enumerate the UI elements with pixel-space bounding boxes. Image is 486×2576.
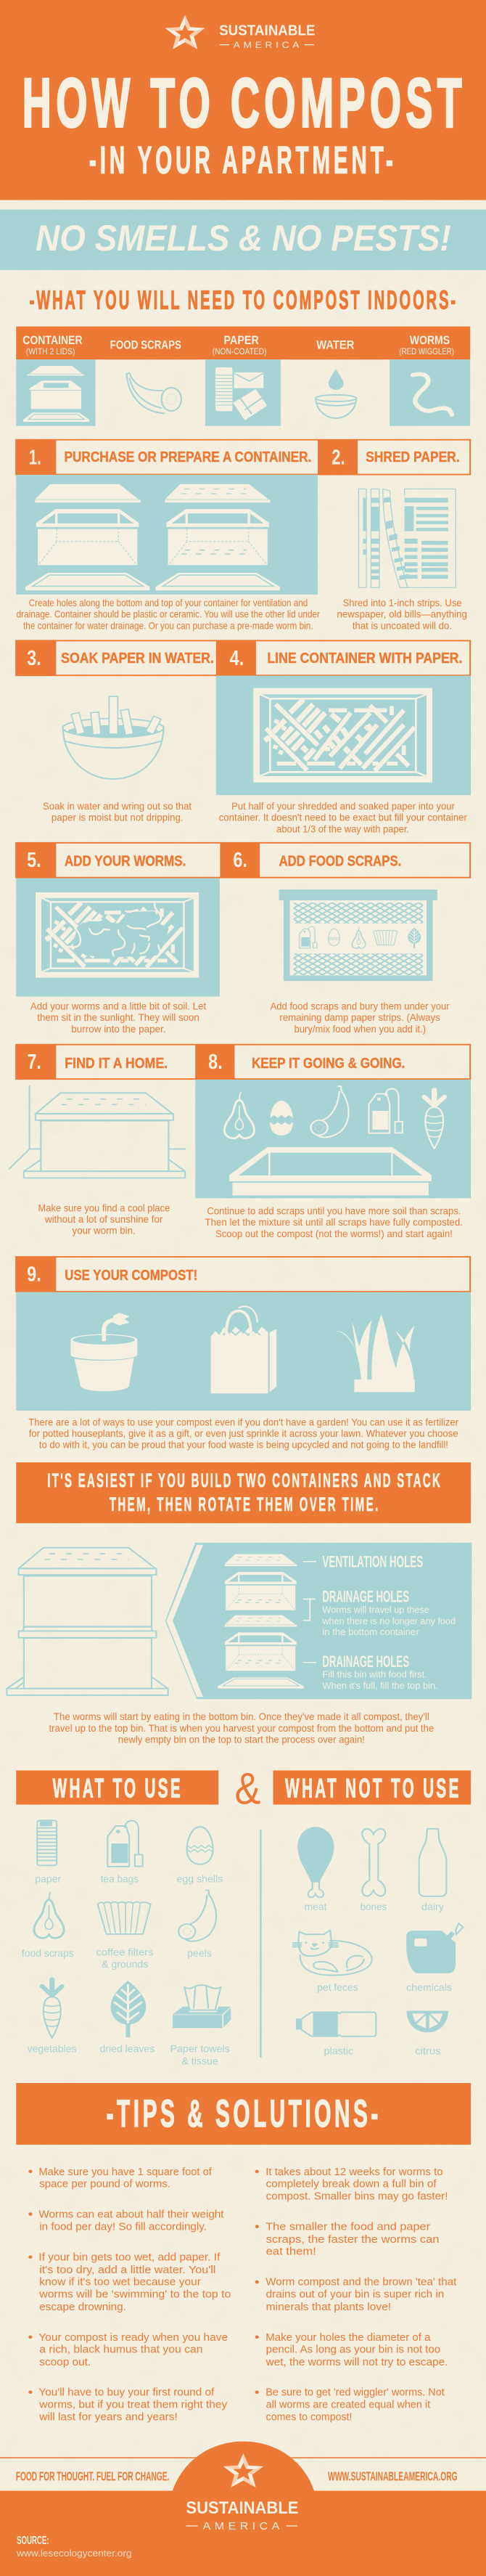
- item: plastic: plastic: [324, 2046, 353, 2057]
- step 9 body and stacking: [7, 1292, 471, 1699]
- footer logo: SUSTAINABLE: [186, 2499, 298, 2518]
- step 1 and 2 header: [16, 440, 470, 475]
- panel: step 9 uses for compost: [16, 1292, 471, 1411]
- item: meat: [297, 1827, 334, 1913]
- tips: left column: [28, 2167, 231, 2423]
- step 7 and 8 header: 7.: [28, 1050, 41, 1074]
- labels and connectors: [302, 1553, 456, 1691]
- step 9 header: USE YOUR COMPOST!: [65, 1268, 197, 1284]
- source credit: SOURCE:: [17, 2535, 49, 2547]
- tagline: FOOD FOR THOUGHT. FUEL FOR CHANGE.: [16, 2469, 169, 2483]
- text: step 1 description: drainage. Container should be plastic or ceramic. You will use the other lid under: [17, 609, 320, 620]
- text: step 5 description: burrow into the paper.: [71, 1024, 166, 1035]
- steps 1 to 4: [16, 440, 471, 835]
- text: step 6 description: Add food scraps and bury them under your: [271, 1001, 450, 1012]
- item: paper: paper: [35, 1874, 61, 1885]
- step 5 and 6 header: ADD YOUR WORMS.: [65, 854, 186, 869]
- banner: tips and solutions: -TIPS & SOLUTIONS-: [107, 2092, 378, 2135]
- step 7 and 8 header: FIND IT A HOME.: [65, 1056, 168, 1072]
- tips: right column: compost. Smaller bins may go faster!: [266, 2190, 448, 2202]
- panel: step 8 food scraps and tray: [195, 1080, 471, 1198]
- text: step 3 description: [43, 802, 191, 824]
- item: paper: [35, 1820, 61, 1885]
- text: step 8 description: Scoop out the compost (not the worms!) and start again!: [215, 1229, 453, 1240]
- item: paper towels and tissue: [170, 1985, 231, 2067]
- text: step 1 description: Create holes along the bottom and top of your container for ventilation and: [29, 598, 308, 609]
- text: step 7 description: Make sure you find a cool place: [38, 1203, 170, 1214]
- supplies header labels: FOOD SCRAPS: [110, 338, 181, 351]
- text: step 6 description: bury/mix food when you add it.): [295, 1024, 426, 1035]
- item: dairy: [419, 1829, 446, 1913]
- text: step 4 description: about 1/3 of the way with paper.: [276, 824, 409, 835]
- tips: left column: scoop out.: [39, 2357, 91, 2368]
- step 1 and 2 header: 1.: [29, 445, 41, 469]
- header area: [0, 0, 486, 426]
- illustration: paper soaking in bowl: [62, 696, 164, 779]
- heading: what you will need: -WHAT YOU WILL NEED TO COMPOST INDOORS-: [30, 287, 456, 315]
- item: citrus: [407, 2010, 448, 2057]
- supplies header labels: WATER: [316, 338, 354, 351]
- icon: paper: [205, 359, 281, 426]
- item: plastic: [296, 2012, 376, 2057]
- tips and footer: [0, 2167, 486, 2576]
- item: meat: meat: [305, 1902, 326, 1913]
- tips: left column: Worms can eat about half their weight: [38, 2209, 224, 2220]
- labels and connectors: Worms will travel up these: [322, 1605, 429, 1615]
- text: step 5 description: Add your worms and a little bit of soil. Let: [30, 1001, 206, 1012]
- tips: left column: You'll have to buy your first round of: [38, 2387, 215, 2399]
- step 3 and 4 header: SOAK PAPER IN WATER.: [61, 651, 214, 667]
- tips: right column: wet, the worms will not try to escape.: [265, 2357, 448, 2368]
- text: step 2 description: Shred into 1-inch strips. Use: [343, 598, 462, 609]
- text: rotation description: newly empty bin on the top to start the process over again!: [118, 1735, 365, 1745]
- item: egg shells: egg shells: [177, 1874, 223, 1885]
- item: coffee filters and grounds: [96, 1902, 154, 1970]
- text: step 6 description: remaining damp paper strips. (Always: [279, 1013, 440, 1024]
- supplies header labels: (RED WIGGLER): [399, 346, 454, 356]
- text: step 1 description: the container for water drainage. Or you can purchase a pre-made worm bin.: [23, 621, 313, 632]
- logo: Sustainable America: SUSTAINABLE: [219, 23, 316, 38]
- logo: Sustainable America: [165, 15, 316, 50]
- item: peels: peels: [187, 1949, 212, 1960]
- footer logo: AMERICA: [202, 2521, 280, 2532]
- tips: right column: pencil. As long as your bin is not too: [266, 2344, 440, 2355]
- item: dried leaves: dried leaves: [100, 2044, 155, 2055]
- panel: step 1 container illustration: [16, 475, 318, 595]
- labels and connectors: DRAINAGE HOLES: [322, 1652, 409, 1671]
- item: tea bags: tea bags: [101, 1874, 139, 1885]
- non-compostable items: [293, 1827, 463, 2057]
- ampersand: &: [234, 1764, 260, 1814]
- logo: Sustainable America: AMERICA: [234, 40, 300, 50]
- tips: left column: in food per day! So fill accordingly.: [39, 2221, 207, 2233]
- item: peels: [178, 1890, 216, 1960]
- text: step 5 description: them sit in the sunlight. They will soon: [37, 1013, 199, 1024]
- banner: build two containers: THEM, THEN ROTATE THEM OVER TIME.: [110, 1493, 378, 1515]
- panel: exploded diagram: [165, 1543, 471, 1699]
- step 1 and 2 header: 2.: [331, 445, 345, 469]
- text: step 5 description: [30, 1001, 206, 1035]
- item: coffee filters and grounds: & grounds: [102, 1960, 148, 1970]
- item: vegetables: vegetables: [28, 2044, 77, 2055]
- step 5 and 6 header: [16, 843, 470, 878]
- text: step 7 description: your worm bin.: [73, 1226, 136, 1236]
- text: rotation description: The worms will start by eating in the bottom bin. Once they've made it all compost, they'll: [54, 1712, 429, 1723]
- text: step 4 description: [219, 802, 467, 835]
- tips: right column: minerals that plants love!: [266, 2302, 391, 2313]
- item: bones: bones: [361, 1902, 387, 1913]
- labels and connectors: in the bottom container: [322, 1627, 419, 1637]
- item: paper towels and tissue: & tissue: [181, 2056, 218, 2067]
- divider: [260, 1830, 262, 2058]
- panel: orange title banner: [0, 0, 486, 200]
- item: egg shells: [177, 1827, 223, 1885]
- panel: no smells band: [0, 210, 486, 270]
- tips: right column: It takes about 12 weeks for worms to: [265, 2167, 443, 2178]
- item: food scraps: [22, 1892, 74, 1960]
- item: vegetables: [28, 1980, 77, 2055]
- tips: right column: scraps, the faster the worms can: [266, 2234, 439, 2246]
- step 5 and 6 header: ADD FOOD SCRAPS.: [279, 854, 401, 869]
- text: rotation description: travel up to the top bin. That is when you harvest your compost from the bottom and put the: [49, 1724, 434, 1735]
- tips: left column: it's too dry, add a little water. You'll: [39, 2265, 215, 2276]
- text: step 2 description: newspaper, old bills—anything: [337, 609, 467, 620]
- illustration: food scraps in bin: [279, 889, 437, 981]
- text: step 1 description: [17, 598, 320, 632]
- what to use section: [16, 1712, 471, 2145]
- supplies header labels: CONTAINER: [22, 333, 83, 347]
- tips: left column: will last for years and years!: [38, 2411, 178, 2423]
- item: pet feces: [293, 1931, 372, 1994]
- item: food scraps: food scraps: [22, 1949, 74, 1960]
- tips: left column: a rich, black humus that you can: [39, 2344, 202, 2355]
- heading: what to use: [16, 1770, 218, 1805]
- icon: banana: [126, 373, 181, 413]
- tips: right column: drains out of your bin is super rich in: [266, 2288, 444, 2300]
- tips: left column: space per pound of worms.: [39, 2178, 170, 2190]
- supplies header labels: PAPER: [224, 333, 259, 347]
- icon: water drop and bowl: [316, 369, 356, 418]
- supplies header labels: WORMS: [410, 333, 450, 347]
- tips: right column: Be sure to get 'red wiggler' worms. Not: [265, 2387, 445, 2399]
- tips: right column: Worm compost and the brown 'tea' that: [265, 2276, 457, 2288]
- tips: left column: know if it's too wet because your: [39, 2276, 201, 2288]
- icon: worm: [390, 359, 470, 426]
- labels and connectors: when there is no longer any food: [321, 1616, 456, 1626]
- compostable items: [22, 1820, 231, 2067]
- illustration: worm bin in a corner: [9, 1086, 186, 1178]
- item: dairy: dairy: [421, 1902, 445, 1913]
- item: chemicals: [406, 1923, 463, 1994]
- steps 5 to 9: [9, 843, 471, 1292]
- panel: step 5 worms in container: [16, 878, 220, 996]
- item: paper towels and tissue: Paper towels: [170, 2044, 230, 2055]
- supplies header labels: (NON-COATED): [213, 346, 266, 356]
- text: step 8 description: [205, 1206, 463, 1240]
- source credit: [16, 2535, 132, 2559]
- tips: right column: eat them!: [266, 2246, 316, 2257]
- exploded bin parts: [218, 1554, 304, 1689]
- subtitle: -IN YOUR APARTMENT-: [89, 139, 393, 182]
- step 7 and 8 header: [16, 1045, 470, 1080]
- tips: left column: Your compost is ready when you have: [38, 2332, 228, 2344]
- item: bones: [361, 1829, 387, 1913]
- text: rotation description: [49, 1712, 434, 1745]
- step 9 header: 9.: [27, 1262, 41, 1286]
- tips: left column: If your bin gets too wet, add paper. If: [38, 2251, 221, 2263]
- heading: what not to use: WHAT NOT TO USE: [285, 1774, 458, 1803]
- heading: what to use: WHAT TO USE: [53, 1774, 181, 1803]
- step 1 and 2 header: PURCHASE OR PREPARE A CONTAINER.: [64, 449, 311, 465]
- step 7 and 8 header: 8.: [208, 1050, 223, 1074]
- item: chemicals: chemicals: [406, 1983, 452, 1994]
- source credit: www.lesecologycenter.org: [16, 2548, 132, 2559]
- tips: right column: all worms are created equal when it: [266, 2399, 431, 2410]
- step 5 and 6 header: 6.: [233, 848, 247, 872]
- step 3 and 4 header: [16, 640, 470, 676]
- step 5 and 6 header: 5.: [27, 848, 41, 872]
- banner: build two containers: IT'S EASIEST IF YOU BUILD TWO CONTAINERS AND STACK: [47, 1470, 440, 1491]
- text: step 6 description: [271, 1001, 450, 1035]
- step 9 header: [16, 1257, 470, 1292]
- text: step 2 description: that is uncoated will do.: [353, 621, 452, 632]
- item: coffee filters and grounds: coffee filters: [96, 1947, 154, 1958]
- footer logo: [186, 2453, 298, 2532]
- tips: right column: [255, 2167, 457, 2423]
- labels and connectors: When it's full, fill the top bin.: [322, 1681, 438, 1691]
- text: step 7 description: [38, 1203, 170, 1236]
- item: tea bags: [101, 1821, 143, 1885]
- illustration: shredded paper: [358, 489, 456, 587]
- tips: right column: The smaller the food and paper: [265, 2221, 430, 2233]
- item: dried leaves: [100, 1981, 155, 2055]
- step 3 and 4 header: 4.: [230, 646, 244, 670]
- panel: step 4 paper-lined container: [216, 676, 471, 795]
- step 7 and 8 header: KEEP IT GOING & GOING.: [252, 1056, 405, 1072]
- supplies header labels: (WITH 2 LIDS): [26, 346, 75, 356]
- icon: potted plant: [70, 1313, 137, 1391]
- step 1 and 2 header: SHRED PAPER.: [366, 449, 460, 465]
- step 3 and 4 header: 3.: [27, 646, 41, 670]
- tips: left column: worms will be 'swimming' to the top to: [38, 2288, 231, 2300]
- banner: build two containers: [16, 1462, 471, 1523]
- tips: right column: Make your holes the diameter of a: [265, 2332, 431, 2344]
- banner: tips and solutions: [16, 2083, 471, 2145]
- tips: right column: completely break down a full bin of: [266, 2178, 437, 2190]
- scrap icons row: [224, 1086, 445, 1149]
- panel: supplies table: [16, 327, 470, 426]
- tips: left column: escape drowning.: [39, 2302, 126, 2313]
- title: HOW TO COMPOST: [22, 64, 462, 142]
- text: step 2 description: [337, 598, 467, 632]
- text: step 3 description: Soak in water and wring out so that: [43, 802, 191, 812]
- illustration: stacked bins: [7, 1548, 168, 1695]
- supplies header labels: [16, 327, 470, 359]
- tips: right column: comes to compost!: [266, 2411, 352, 2423]
- icon: gift bag: [211, 1306, 276, 1393]
- labels and connectors: Fill this bin with food first.: [322, 1669, 427, 1680]
- item: pet feces: pet feces: [317, 1983, 358, 1994]
- footer: [0, 2442, 486, 2576]
- icon: container with lids: [16, 359, 96, 426]
- labels and connectors: DRAINAGE HOLES: [322, 1587, 409, 1605]
- icon: grass: [337, 1314, 415, 1392]
- item: citrus: citrus: [415, 2046, 441, 2057]
- text: step 3 description: paper is moist but not dripping.: [52, 812, 184, 824]
- tips: left column: worms, but if you treat them right they: [38, 2399, 228, 2410]
- tips: left column: Make sure you have 1 square foot of: [38, 2167, 213, 2178]
- text: step 9 description: [28, 1417, 458, 1451]
- text: step 7 description: without a lot of sunshine for: [44, 1215, 162, 1226]
